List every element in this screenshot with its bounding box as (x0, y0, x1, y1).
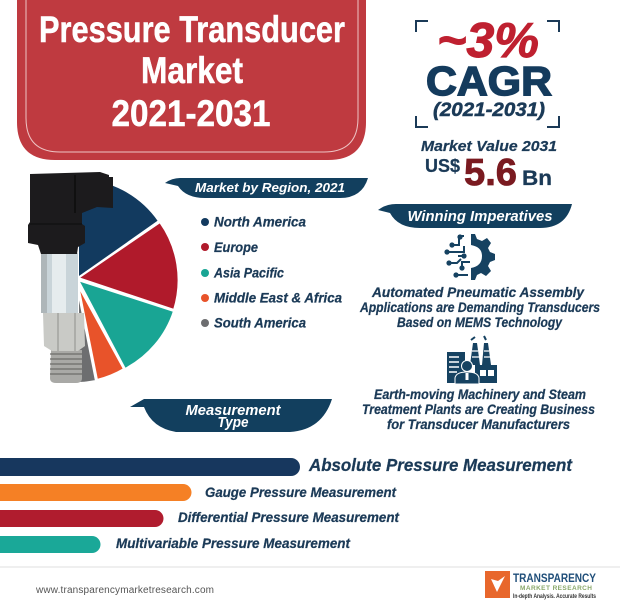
logo: transparency market research: MARKET RESEARCH (520, 585, 592, 592)
callout: market value: 5.6 (464, 152, 517, 194)
heading: winning imperatives banner (378, 204, 572, 228)
logo: transparency market research: In-depth Analysis. Accurate Results (513, 594, 597, 600)
text: earth-moving machinery (362, 387, 595, 432)
title text: Pressure Transducer (39, 9, 345, 50)
bar: differential pressure: Differential Pressure Measurement (178, 509, 400, 525)
bar: differential pressure (0, 509, 400, 527)
callout: market value (421, 138, 557, 194)
callout: CAGR: (2021-2031) (433, 100, 545, 121)
legend: regions: Europe (214, 240, 258, 255)
heading: measurement type banner: Measurement (186, 403, 282, 419)
heading: measurement type banner (130, 399, 332, 432)
heading: market by region banner: Market by Region, 2021 (195, 180, 345, 195)
legend: regions: North America (214, 214, 306, 230)
callout: CAGR: ~3% (437, 14, 539, 68)
bar: gauge pressure (0, 484, 397, 501)
bar: gauge pressure: Gauge Pressure Measurement (205, 484, 397, 500)
text: pneumatic assembly: Automated Pneumatic Assembly (371, 285, 585, 300)
callout: market value: Market Value 2031 (421, 138, 557, 155)
logo: transparency market research (485, 571, 597, 600)
callout: CAGR (416, 14, 559, 127)
pie chart: market by region (78, 178, 179, 383)
legend: regions (201, 214, 342, 330)
bar: absolute pressure: Absolute Pressure Measurement (308, 455, 573, 475)
text: pneumatic assembly: Applications are Demanding Transducers (359, 300, 600, 315)
callout: market value: US$ (425, 156, 460, 176)
image: pressure transducer (28, 172, 113, 383)
heading: measurement type banner: Type (218, 415, 248, 431)
icon: gear with circuit (444, 234, 495, 280)
text: pneumatic assembly: Based on MEMS Technology (397, 315, 563, 330)
panel: title (17, 0, 366, 160)
text: earth-moving machinery: Earth-moving Machinery and Steam (374, 387, 586, 402)
text: pneumatic assembly (359, 285, 600, 330)
footer: website: www.transparencymarketresearch.com (35, 585, 214, 596)
title text (39, 9, 345, 134)
legend: regions: Asia Pacific (213, 266, 284, 280)
legend: regions: South America (214, 316, 306, 330)
logo: transparency market research: TRANSPARENCY (513, 571, 596, 585)
heading: market by region banner (165, 178, 368, 198)
icon: factory and worker (447, 336, 497, 384)
heading: winning imperatives banner: Winning Imperatives (408, 209, 552, 225)
bar: multivariable pressure (0, 535, 351, 553)
legend: regions: Middle East & Africa (214, 290, 342, 306)
bar: absolute pressure (0, 455, 573, 476)
title text: Market (141, 50, 243, 91)
title text: 2021-2031 (112, 93, 270, 134)
text: earth-moving machinery: Treatment Plants are Creating Business (362, 402, 595, 417)
callout: market value: Bn (522, 167, 552, 190)
callout: CAGR: CAGR (426, 58, 552, 104)
bar: multivariable pressure: Multivariable Pressure Measurement (116, 535, 351, 551)
text: earth-moving machinery: for Transducer Manufacturers (387, 417, 570, 432)
